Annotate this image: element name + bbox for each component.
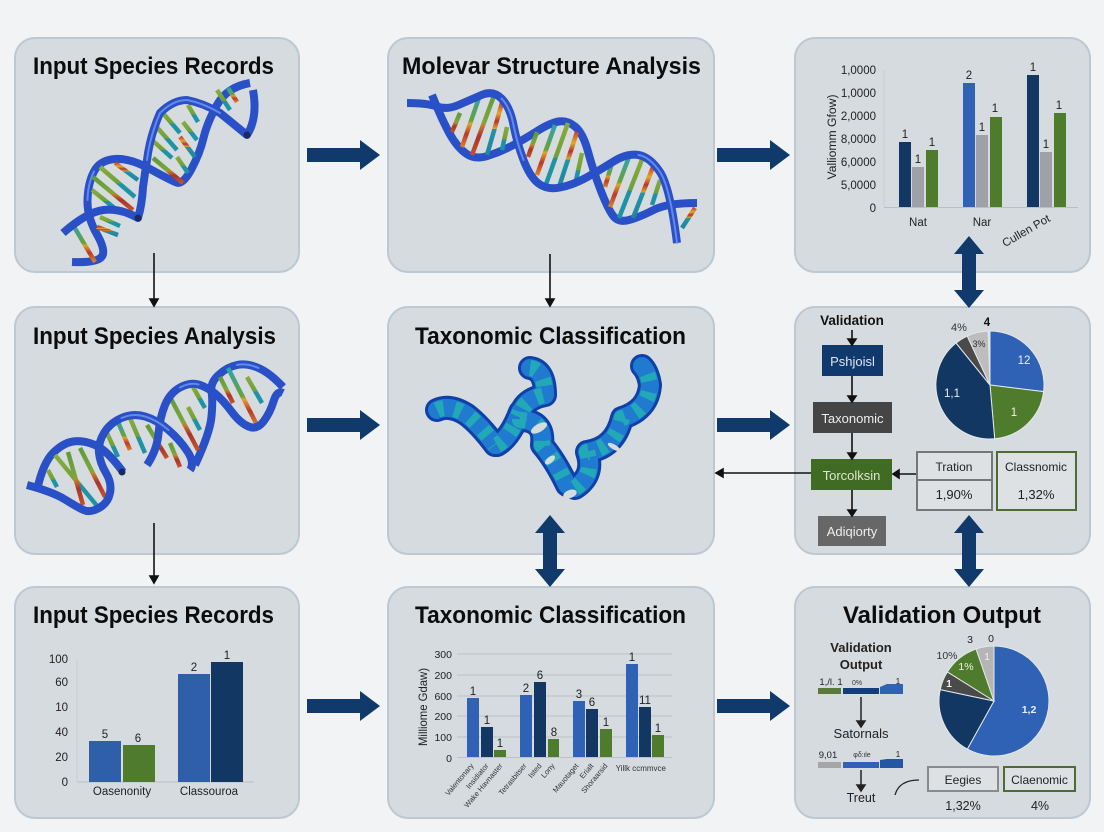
panel: taxonomic classification protein [388,307,714,554]
y axis labels: 20 [55,752,68,764]
y axis labels: 0 [870,203,876,215]
x axis labels: Valentonary [443,761,476,798]
bar group three: 3 [576,689,582,701]
curved connector [895,780,919,795]
heading: Molevar Structure Analysis [402,53,701,80]
x axis labels: Insidiator [464,761,491,791]
heading: Taxonomic Classification [415,602,686,629]
mini bar one: 0% [852,680,862,687]
gridlines and y axis labels: 200 [434,670,452,682]
pie labels: 1,2 [1022,704,1036,716]
box: Eegies [928,767,998,791]
mini arrow two [857,770,865,791]
gridlines and y axis labels [434,649,672,765]
box: Eegies: Eegies [945,773,981,787]
icon: protein ribbon [437,366,650,500]
bar group: Nat: 1 [929,137,935,149]
pie labels: 1 [946,678,952,690]
pie labels: 4% [951,322,967,334]
table: Classnomic [997,452,1076,510]
flow box: Pshjoisl [822,345,883,376]
bar group: Nar: 2 [966,70,972,82]
panel: input species records top [15,38,299,272]
bar group three: 6 [589,697,595,709]
arrow: bottom classification to output [717,691,790,721]
bar group: Classouroa [178,650,243,798]
bar group: Classouroa: Classouroa [180,786,239,798]
bar group: Cullen Pot: 1 [1030,62,1036,74]
table: Tration [917,452,992,510]
bar group: Oasenonity: Oasenonity [93,786,151,798]
pie labels: 1 [984,651,990,663]
bar group: Oasenonity [89,729,155,798]
arrow: bottom records to classification [307,691,380,721]
y axis labels: 0 [62,777,68,789]
y axis title: Milliome Gdaw) [416,668,430,746]
panel: taxonomic classification bar chart [388,587,714,818]
mini bar two: 9,01 [819,750,837,761]
pie labels: 0 [988,633,994,645]
icon: DNA helix two [407,93,697,243]
double arrow: classification panels [535,515,565,587]
flow box: Taxonomic: Taxonomic [821,411,884,426]
pie labels: 3% [972,339,986,349]
pie labels: 1% [958,661,974,673]
x axis labels: Shoraarsid [579,762,610,795]
label: Treut: Treut [847,791,876,805]
y axis labels: 60 [55,677,68,689]
y axis labels [49,654,68,789]
flow box: Adiqiorty: Adiqiorty [827,524,878,539]
arrow: molecular to chart [717,140,790,170]
icon: DNA helix one [63,83,255,262]
bar group: Nat: 1 [915,154,921,166]
gridlines and y axis labels: 0 [446,753,452,765]
bar group: Nat: Nat [909,217,928,229]
table: Tration: Tration [936,460,972,474]
y axis labels: 1,0000 [841,88,876,100]
bar group two: 8 [551,727,557,739]
gridlines and y axis labels: 300 [434,649,452,661]
mini bar one: 1,/l. 1 [819,677,843,688]
bar group: Oasenonity: 5 [102,729,108,741]
double arrow: chart and validation [954,236,984,308]
bar group: Nat [899,129,938,229]
thin arrow: validation back to classification [716,469,811,477]
pie labels: 1,1 [944,388,960,400]
gridlines and y axis labels: 100 [434,732,452,744]
flow heading: Validation [820,313,884,328]
flow box: Pshjoisl: Pshjoisl [830,354,875,369]
bar group: Cullen Pot [1001,62,1066,250]
x axis labels: Erialt [578,761,596,780]
bar group: Oasenonity: 6 [135,733,141,745]
bar group: Nar: 1 [992,103,998,115]
flow box: Taxonomic [813,402,892,433]
bar group two: 6 [537,670,543,682]
flow box: Adiqiorty [818,516,886,546]
table: Classnomic: 1,32% [1018,487,1055,502]
pie chart [936,331,1044,439]
heading: Input Species Analysis [33,323,276,350]
x axis labels: Isted [526,762,544,780]
mini bar two [818,750,903,768]
table: Tration: 1,90% [936,487,973,502]
pie labels: 3 [967,634,973,646]
bar group: Nar [963,70,1002,229]
bar group: Cullen Pot: Cullen Pot [1001,213,1053,250]
y axis labels: 2,0000 [841,111,876,123]
thin arrow: molecular to classification [546,254,554,306]
y axis labels: 40 [55,727,68,739]
mini bar one: 1 [896,677,901,686]
pie labels: 12 [1018,355,1030,367]
arrow: analysis to classification [307,410,380,440]
pie labels [944,317,1030,419]
values: 1,32% [945,799,981,813]
mini bar one [818,677,903,694]
x axis labels: Lony [539,761,557,780]
x axis labels: Mauotaget [551,761,581,794]
icon: DNA helix three [27,364,283,511]
arrow: records to molecular [307,140,380,170]
panel: validation output: Output [840,657,883,672]
gridlines and y axis labels: 600 [434,691,452,703]
pie labels: 10% [936,650,958,662]
heading: Input Species Records [33,53,274,80]
bar group two: 2 [523,683,529,695]
flow box: Torcolksin [811,459,892,490]
values [945,799,1049,813]
flow arrows [848,330,916,516]
box: Claenomic [1004,767,1075,791]
x axis labels: Wake Havnaster [462,761,505,810]
bar group one: 1 [497,738,503,750]
bar group: Classouroa: 2 [191,662,197,674]
bar group three [573,689,612,757]
bar group one: 1 [484,715,490,727]
bar group four [626,652,664,757]
mini bar two: 1 [896,750,901,759]
subheading: Validation [830,640,892,655]
bar group one: 1 [470,686,476,698]
y axis labels: 10 [55,702,68,714]
panel: validation flow and pie [795,307,1090,554]
panel: validation output [795,587,1090,818]
y axis labels: 100 [49,654,68,666]
panel: top right bar chart [795,38,1090,272]
mini arrow one [857,697,865,727]
pie labels: 1 [1011,407,1017,419]
heading: Input Species Records [33,602,274,629]
y axis labels: 5,0000 [841,180,876,192]
bar group: Cullen Pot: 1 [1043,139,1049,151]
bar group three: 1 [603,717,609,729]
y axis labels: 8,0000 [841,134,876,146]
x axis labels [443,761,667,810]
x axis labels: Tetrasbitser [497,761,529,797]
bar group four: 1 [655,723,661,735]
y axis labels [841,65,876,215]
bar group one [467,686,506,757]
values: 4% [1031,799,1049,813]
box: Claenomic: Claenomic [1011,773,1068,787]
bar group: Cullen Pot: 1 [1056,100,1062,112]
flow box: Torcolksin: Torcolksin [823,468,880,483]
thin arrow: analysis to records [150,523,158,583]
double arrow: validation and output [954,515,984,587]
label: Satornals: Satornals [834,726,889,741]
bar group four: 11 [639,695,651,707]
pie labels: 4 [984,317,991,329]
x axis labels: Yillk ccmmvce [616,764,667,773]
table: Classnomic: Classnomic [1005,460,1067,474]
mini bar two: φδ:ιle [853,752,871,759]
bar group two [520,670,559,757]
bar group: Nar: 1 [979,122,985,134]
panel: molecular structure analysis [388,38,714,272]
panel: input species analysis [15,307,299,554]
y axis title: Valliomm Gfow) [827,94,839,179]
bar group: Nar: Nar [973,217,991,229]
pie labels [936,633,1036,716]
y axis labels: 1,0000 [841,65,876,77]
gridlines and y axis labels: 200 [434,711,452,723]
panel: input species records bar chart [15,587,299,818]
y axis labels: 6,0000 [841,157,876,169]
heading: Taxonomic Classification [415,323,686,350]
thin arrow: records to analysis [150,253,158,306]
pie chart [939,646,1049,756]
bar group four: 1 [629,652,635,664]
heading: Validation Output [843,602,1041,629]
bar group: Classouroa: 1 [224,650,230,662]
arrow: classification to validation [717,410,790,440]
bar group: Nat: 1 [902,129,908,141]
